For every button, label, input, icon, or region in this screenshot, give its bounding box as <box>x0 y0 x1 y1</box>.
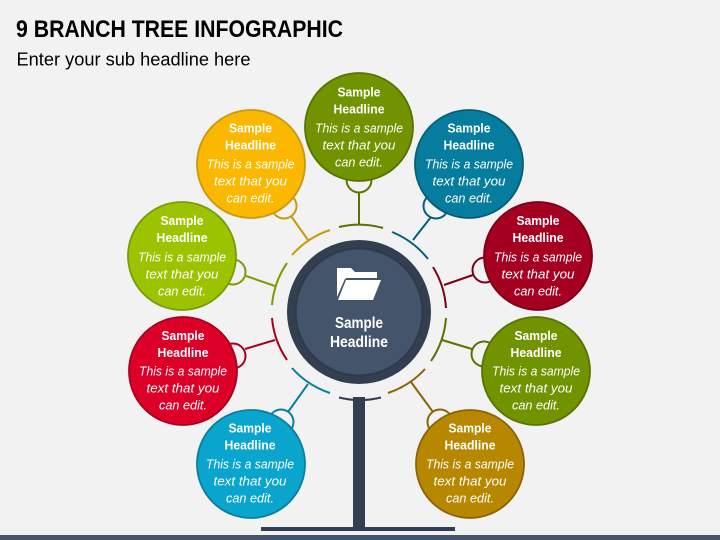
branch: olive right: text that you <box>500 380 572 396</box>
footer bar <box>0 535 720 540</box>
branch: sky blue <box>197 368 330 518</box>
branch: top olive: This is a sample <box>315 120 403 136</box>
branch: top olive <box>305 73 413 228</box>
branch: olive right: This is a sample <box>492 364 580 378</box>
branch: teal: This is a sample <box>425 156 513 172</box>
branch: yellow: Sample <box>229 120 272 136</box>
branch: red: Headline <box>158 345 208 360</box>
branch: red <box>129 317 287 425</box>
branch: sky blue: text that you <box>214 474 286 488</box>
branch: yellow: text that you <box>214 174 287 188</box>
branch: yellow: can edit. <box>226 190 274 206</box>
branch: lime green: can edit. <box>158 284 206 298</box>
tree trunk and base <box>261 397 455 531</box>
branch: red: text that you <box>146 380 220 396</box>
branch: teal: can edit. <box>445 190 493 206</box>
branch: lime green: This is a sample <box>138 250 226 264</box>
icon: folder <box>337 268 381 300</box>
branch: red: Sample <box>162 328 204 343</box>
branch: dark red: Headline <box>512 230 564 245</box>
branch: brown: Headline <box>444 438 496 452</box>
branch: yellow <box>197 110 330 255</box>
branch: teal: Sample <box>448 120 490 136</box>
branch: top olive: Sample <box>338 84 380 100</box>
branch: lime green <box>128 202 287 310</box>
branch: lime green: text that you <box>146 266 218 282</box>
branch: yellow: Headline <box>225 138 276 152</box>
branch: brown: text that you <box>434 474 506 488</box>
hub label: Headline <box>330 334 388 351</box>
branch: dark red <box>433 202 592 310</box>
branch: dark red: Sample <box>516 213 560 228</box>
branch: sky blue: Sample <box>228 420 272 436</box>
branch: olive right <box>431 317 590 425</box>
branch: dark red: can edit. <box>514 284 562 298</box>
branch: top olive: text that you <box>322 138 396 152</box>
branch: sky blue: can edit. <box>226 490 274 506</box>
branch: dark red: This is a sample <box>494 250 582 264</box>
branch: red: can edit. <box>159 398 207 412</box>
branch: lime green: Sample <box>160 213 204 228</box>
subtitle: Enter your sub headline here <box>16 50 250 70</box>
branch: yellow: This is a sample <box>206 156 294 172</box>
branch: brown: This is a sample <box>426 456 514 472</box>
branch: lime green: Headline <box>156 230 208 245</box>
branch: olive right: Sample <box>514 328 558 343</box>
branch: sky blue: Headline <box>224 438 276 452</box>
branch: top olive: can edit. <box>335 154 383 170</box>
branch: teal: Headline <box>444 138 494 152</box>
branch: red: This is a sample <box>139 364 227 378</box>
hub label: Sample <box>335 315 383 332</box>
title: 9 BRANCH TREE INFOGRAPHIC <box>16 16 343 43</box>
branch: brown: can edit. <box>446 490 494 506</box>
branch: olive right: can edit. <box>512 398 560 412</box>
hub label <box>330 315 388 351</box>
branch: dark red: text that you <box>502 266 574 282</box>
central hub <box>287 240 431 384</box>
branch: top olive: Headline <box>334 102 384 116</box>
branch: teal <box>392 110 523 259</box>
branch: brown <box>388 369 524 518</box>
branch: brown: Sample <box>448 420 492 436</box>
branch: olive right: Headline <box>510 345 562 360</box>
branch: sky blue: This is a sample <box>206 456 294 472</box>
dark arc above trunk <box>339 398 381 400</box>
branch: teal: text that you <box>432 174 506 188</box>
